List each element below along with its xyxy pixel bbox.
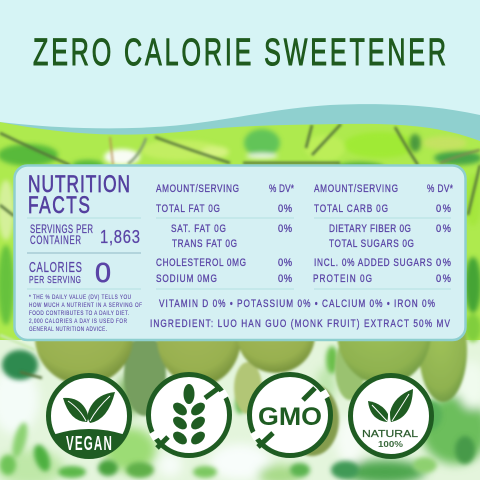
table: nutrients right column	[313, 183, 453, 285]
text: daily value footnote: * THE % DAILY VALUE (DV) TELLS YOU	[29, 295, 131, 301]
table: nutrients left column: SODIUM 0MG	[156, 273, 217, 285]
table: nutrients left column: 0%	[278, 273, 292, 285]
header wave band	[0, 0, 480, 141]
table: nutrients left column	[156, 183, 294, 285]
table: nutrients right column: 0%	[436, 273, 451, 285]
text: calories per serving: 0	[95, 257, 111, 288]
text: servings per container	[30, 224, 140, 248]
heading: nutrition facts: FACTS	[28, 192, 90, 219]
icon: non-GMO badge	[250, 374, 330, 456]
icon: gluten free wheat badge	[148, 374, 230, 456]
text: servings per container: SERVINGS PER	[30, 224, 93, 237]
table: nutrients left column: SAT. FAT 0G	[171, 223, 226, 235]
text: daily value footnote: GENERAL NUTRITION ADVICE.	[29, 327, 107, 333]
table: nutrients left column: % DV*	[269, 183, 294, 195]
text: servings per container: 1,863	[100, 226, 140, 247]
icon: vegan badge	[48, 376, 130, 456]
heading: nutrition facts: NUTRITION	[28, 171, 130, 198]
table: nutrients left column: 0%	[278, 223, 292, 235]
table: nutrients left column: TOTAL FAT 0G	[156, 203, 220, 215]
table: nutrients right column: DIETARY FIBER 0G	[329, 223, 411, 235]
text: daily value footnote: 2,000 CALORIES A DAY IS USED FOR	[29, 319, 127, 325]
icon: non-GMO badge: GMO	[258, 403, 322, 431]
table: nutrients right column: PROTEIN 0G	[313, 273, 372, 285]
table: nutrients left column: AMOUNT/SERVING	[156, 183, 239, 195]
table: nutrients right column: INCL. 0% ADDED SUGARS	[314, 257, 432, 269]
table: nutrients left column: 0%	[278, 257, 292, 269]
title: ZERO CALORIE SWEETENER	[33, 31, 446, 73]
text: calories per serving	[29, 257, 111, 288]
text: daily value footnote: HOW MUCH A NUTRIENT IN A SERVING OF	[29, 303, 143, 309]
fruits	[35, 281, 467, 456]
table: nutrients left column: 0%	[278, 203, 292, 215]
text: daily value footnote: FOOD CONTRIBUTES TO A DAILY DIET.	[29, 311, 129, 317]
text: daily value footnote	[29, 295, 143, 333]
text: ingredient line: INGREDIENT: LUO HAN GUO (MONK FRUIT) EXTRACT 50% MV	[150, 318, 450, 330]
table: nutrients right column: AMOUNT/SERVING	[314, 183, 398, 195]
icon: natural 100% badge	[350, 376, 432, 456]
text: calories per serving: CALORIES	[29, 259, 82, 276]
text: vitamins and minerals: VITAMIN D 0% • POTASSIUM 0% • CALCIUM 0% • IRON 0%	[159, 298, 435, 310]
table: nutrients left column: CHOLESTEROL 0MG	[156, 257, 246, 269]
text: calories per serving: PER SERVING	[29, 274, 81, 285]
icon: natural 100% badge: 100%	[378, 440, 403, 449]
table: nutrients right column: 0%	[436, 257, 451, 269]
table: nutrients right column: 0%	[436, 203, 451, 215]
icon: vegan badge: VEGAN	[66, 433, 112, 455]
heading: nutrition facts	[28, 171, 130, 219]
table: nutrients right column: TOTAL CARB 0G	[314, 203, 388, 215]
table: nutrients right column: % DV*	[427, 183, 453, 195]
text: servings per container: CONTAINER	[30, 235, 81, 248]
table: nutrients left column: TRANS FAT 0G	[172, 238, 237, 250]
panel: nutrition facts card	[14, 166, 466, 340]
icon: natural 100% badge: NATURAL	[362, 428, 418, 440]
table: nutrients right column: TOTAL SUGARS 0G	[329, 238, 414, 250]
table: nutrients right column: 0%	[436, 223, 451, 235]
